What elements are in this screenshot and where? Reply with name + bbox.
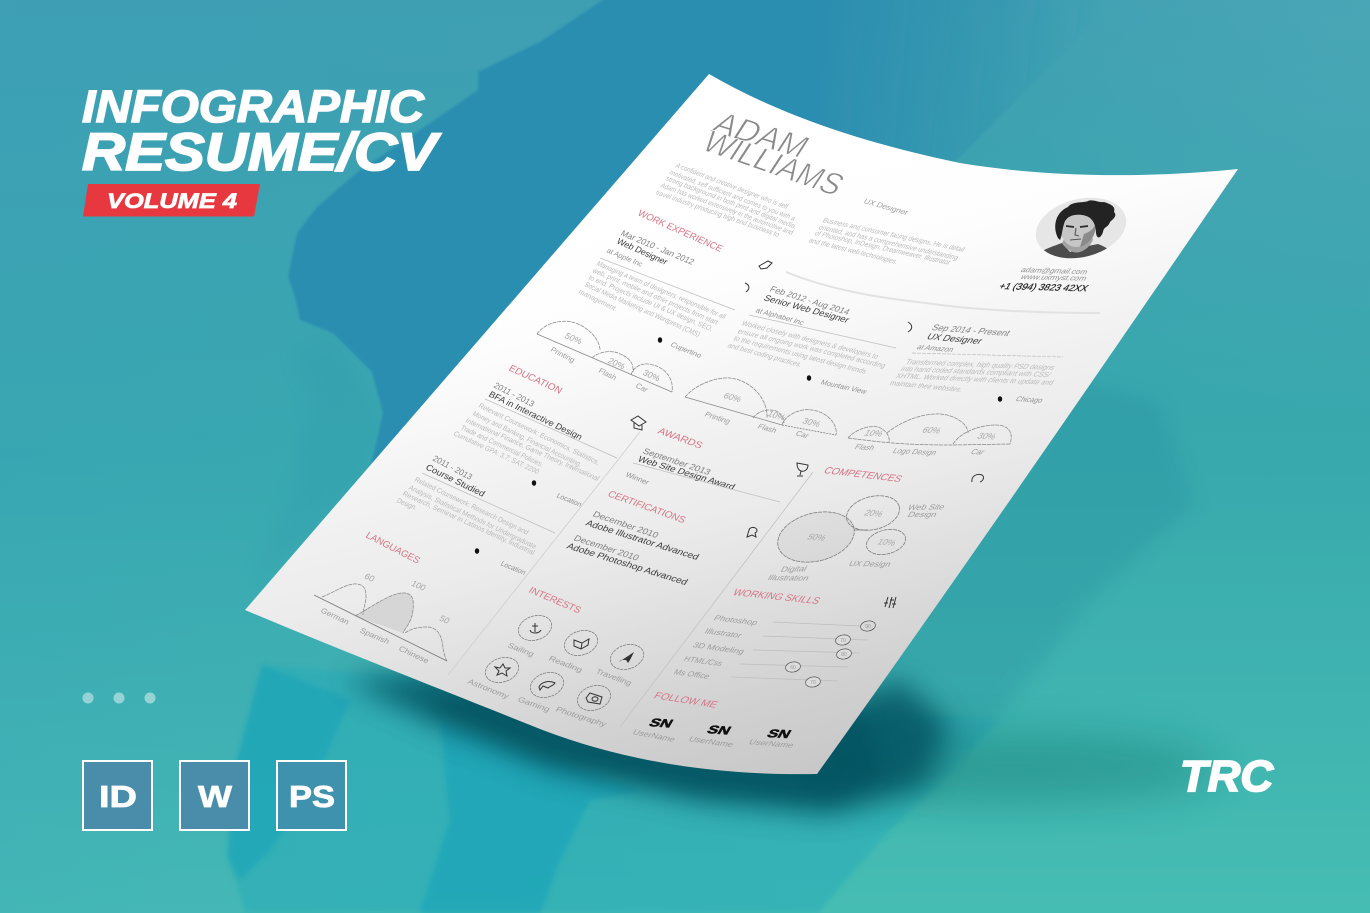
- section: work experience: [577, 208, 735, 360]
- intro paragraph left: motivated, self sufficient and comes to you with a: [668, 168, 798, 223]
- section: competences: COMPETENCES: [821, 466, 904, 485]
- row: Ms Office: 70: [810, 680, 816, 686]
- row: Illustrator: Illustrator: [703, 627, 744, 640]
- chart: skills at third job: [848, 414, 1011, 457]
- section: awards: Web Site Design Award: [636, 454, 737, 492]
- section: education: Course Studied: [424, 462, 487, 499]
- section: education: Trade and Commercial Policies.: [459, 423, 545, 469]
- chart: skills at third job: 10%: [862, 428, 885, 438]
- contact details: www.uxmyst.com: [1018, 273, 1089, 283]
- icon: anchor: [515, 611, 555, 645]
- section: job two: Senior Web Designer: [762, 293, 851, 325]
- section: interests: Travelling: [594, 667, 634, 687]
- chart: skills at first job: Printing: [549, 345, 577, 364]
- chart: skills at first job: 30%: [641, 368, 663, 383]
- section: job three: UX Designer: [925, 331, 985, 346]
- intro paragraph right: of Photoshop, InDesign, Dreamweaver, Illustrator: [813, 229, 953, 267]
- social: first: SN: [646, 716, 676, 730]
- icon: plane: [607, 640, 647, 674]
- section: languages: Spanish: [358, 626, 391, 646]
- icon: star: [482, 653, 522, 687]
- chart: skills at third job: 60%: [920, 425, 943, 435]
- row: Illustrator: [703, 627, 868, 646]
- portrait photo: [1036, 198, 1126, 258]
- social: third: [747, 727, 796, 750]
- row: 3D Modeling: 80: [841, 652, 847, 658]
- chart: skills at second job: Printing: [703, 410, 732, 426]
- chart: skills at third job: Car: [969, 448, 987, 456]
- intro paragraph right: and the latest web technologies.: [807, 236, 900, 266]
- contact details: +1 (394) 3823 42XX: [996, 282, 1091, 294]
- section: education: Relevant Coursework: Economics, Statistics,: [477, 401, 602, 467]
- chart: bubbles: 20%: [862, 508, 885, 519]
- section: certifications: Adobe Photoshop Advanced: [565, 541, 690, 587]
- social: first: [631, 716, 678, 744]
- chart: skills at first job: [537, 321, 672, 394]
- icon: gauge: [972, 474, 983, 482]
- badge: W: W: [198, 779, 233, 814]
- chart: bubbles: 50%: [805, 532, 828, 543]
- panel: resume sheet: [245, 74, 1238, 774]
- name: WILLIAMS: [696, 124, 851, 202]
- section: job two: to the requirements using latest design trends: [732, 334, 869, 376]
- chart: skills at first job: Flash: [597, 366, 618, 382]
- section: interests: Reading: [547, 654, 585, 674]
- icon: wrench: [759, 261, 772, 269]
- social: third: SN: [764, 727, 794, 741]
- section: working skills: WORKING SKILLS: [730, 588, 822, 607]
- section: awards: [624, 426, 808, 502]
- badge: W: [180, 761, 249, 830]
- section: awards: AWARDS: [655, 426, 705, 451]
- row: Illustrator: 70: [840, 638, 846, 644]
- row: 3D Modeling: [691, 641, 860, 660]
- row: Ms Office: Ms Office: [672, 668, 712, 681]
- section: work experience: Social Media Marketing and Wordpress (CMS): [583, 280, 702, 339]
- section: education: 2011 - 2013: [492, 380, 537, 409]
- icon: camera: [574, 681, 614, 715]
- section: education: Analysis, Statistical Methods for Undergraduate: [407, 483, 538, 551]
- badge: PS: PS: [289, 779, 335, 814]
- chart: skills at second job: Car: [794, 429, 811, 440]
- section: languages: 60: [363, 571, 377, 584]
- section: job three: maintain their websites.: [888, 379, 965, 394]
- contact details: [996, 266, 1091, 294]
- section: job two: Feb 2012 - Aug 2014: [768, 284, 852, 317]
- social: second: SN: [704, 723, 734, 737]
- section: interests: INTERESTS: [526, 585, 583, 616]
- icon: pin: [475, 548, 479, 554]
- name: ADAM: [706, 105, 817, 164]
- timeline curve: [786, 272, 1100, 313]
- icon: pin: [532, 480, 536, 486]
- chart: skills at first job: Car: [634, 381, 650, 394]
- section: job three: at Amazon: [915, 343, 956, 354]
- section: certifications: December 2010: [591, 509, 661, 540]
- section: languages: 100: [409, 578, 428, 593]
- logo: TRC: TRC: [1180, 752, 1274, 801]
- chart: skills at second job: 10%: [766, 409, 788, 422]
- chart: skills at second job: 60%: [722, 391, 744, 404]
- row: Ms Office: [672, 668, 838, 688]
- volume badge: [83, 184, 260, 216]
- section: education: Related Coursework: Research Design and: [413, 475, 531, 537]
- volume badge: VOLUME 4: [107, 190, 237, 213]
- section: education: 2011 - 2013: [431, 453, 475, 482]
- section: work experience: Web Designer: [615, 236, 670, 267]
- contact details: adam@gmail.com: [1019, 266, 1090, 276]
- section: interests: Photography: [554, 705, 609, 729]
- section: interests: Gaming: [516, 695, 552, 714]
- section: certifications: Adobe Illustrator Advanced: [584, 518, 701, 562]
- section: education: Money and Banking, Financial Accounting,: [471, 409, 584, 469]
- intro paragraph left: Adam has worked extensively in the automotive and: [659, 181, 795, 237]
- role: UX Designer: [862, 197, 911, 217]
- section: languages: LANGUAGES: [363, 530, 422, 566]
- section: interests: [466, 585, 647, 729]
- icon: book: [561, 626, 601, 660]
- section: work experience: web, print, mobile and other projects from start: [590, 266, 720, 326]
- intro paragraph left: strong background in both print and digital media.: [664, 174, 799, 231]
- chart: skills at second job: [685, 378, 836, 440]
- section: education: Research, Seminar in Latinos Identity, Industrial: [401, 489, 537, 557]
- icon: pin: [998, 396, 1002, 402]
- section: certifications: CERTIFICATIONS: [605, 489, 688, 526]
- intro paragraph left: travel industry producing high end business to: [654, 188, 781, 239]
- section: languages: [314, 530, 452, 665]
- row: HTML/Css: 60: [790, 665, 796, 671]
- section: languages: 50: [438, 613, 452, 626]
- section: languages: Chinese: [397, 644, 431, 665]
- section: competences: [766, 466, 983, 583]
- section: education: Location: [555, 491, 584, 509]
- social: third: UserName: [747, 738, 796, 750]
- chart: skills at second job: Flash: [756, 422, 779, 435]
- section: work experience: at Apple Inc: [605, 246, 645, 269]
- title: INFOGRAPHIC: [82, 81, 426, 132]
- section: work experience: Cupertino: [669, 340, 704, 360]
- section: job two: Mountain View: [819, 378, 869, 396]
- section: education: Cumulative GPA: 3.7; SAT: 2200: [452, 429, 541, 476]
- chart: skills at third job: Logo Design: [891, 447, 939, 457]
- section: education: Location: [499, 559, 528, 577]
- section: job two: Worked closely with designers & developers to: [740, 319, 881, 361]
- divider: columns left: [448, 432, 640, 675]
- section: competences: Digital: [779, 565, 809, 574]
- intro paragraph left: A confident and creative designer who is self: [674, 161, 791, 211]
- section: competences: Design: [906, 511, 939, 519]
- section: interests: Sailing: [506, 641, 536, 658]
- section: awards: Winner: [624, 470, 652, 487]
- badge: ID: ID: [99, 779, 137, 814]
- row: 3D Modeling: 3D Modeling: [691, 641, 746, 656]
- section: job three: Sep 2014 - Present: [930, 323, 1013, 338]
- social: second: [687, 723, 736, 749]
- section: certifications: December 2010: [572, 533, 641, 562]
- section: job three: Chicago: [1014, 395, 1045, 405]
- intro paragraph right: Business and consumer facing designs. He is detail: [821, 216, 967, 254]
- chart: skills at third job: Flash: [853, 443, 877, 452]
- row: Photoshop: [712, 614, 876, 632]
- icon: sliders: [884, 597, 896, 608]
- section: interests: Astronomy: [466, 677, 511, 701]
- section: job two: [726, 284, 896, 396]
- section: education: [395, 363, 617, 577]
- section: job two: at Alphabet Inc: [754, 306, 806, 327]
- section: follow me: FOLLOW ME: [651, 691, 720, 711]
- section: job three: [888, 323, 1063, 405]
- icon: chevron first: [745, 283, 749, 292]
- software badges: [83, 761, 346, 830]
- section: competences: UX Design: [847, 560, 893, 569]
- title: [82, 81, 442, 182]
- section: education: EDUCATION: [506, 363, 564, 396]
- icon: gamepad: [527, 668, 567, 702]
- intro paragraph right: oriented, and has a comprehensive understanding: [817, 223, 960, 262]
- section: job two: ensure all ongoing work was completed according: [736, 327, 888, 370]
- section: competences: Illustration: [766, 574, 811, 583]
- section: education: BFA in Interactive Design: [487, 389, 584, 442]
- row: HTML/Css: [682, 655, 848, 673]
- icon: pin: [807, 375, 811, 381]
- divider: columns right: [620, 472, 813, 727]
- section: job three: XHTML. Worked directly with clients to update and: [894, 372, 1056, 387]
- section: education: Design.: [395, 496, 419, 512]
- social: first: UserName: [631, 728, 678, 744]
- section: awards: September 2013: [641, 446, 713, 477]
- section: follow me: [631, 691, 796, 750]
- section: work experience: to end. Projects include UI & UX design, SEO,: [587, 273, 715, 333]
- icon: graduation cap: [631, 416, 646, 430]
- chart: language curves: [314, 584, 447, 661]
- chart: skills at first job: 20%: [606, 356, 628, 371]
- section: competences: Web Site: [906, 503, 947, 512]
- icon: ribbon: [747, 527, 757, 537]
- chart: skills at first job: 50%: [563, 331, 585, 346]
- icon: trophy: [797, 463, 808, 476]
- section: work experience: WORK EXPERIENCE: [635, 208, 725, 255]
- sheet paper: [245, 74, 1238, 774]
- row: Photoshop: Photoshop: [712, 614, 760, 627]
- section: education: International Finance, Game Theory, International: [464, 416, 602, 483]
- pagination dots: [82, 692, 156, 704]
- section: certifications: [565, 489, 757, 587]
- section: languages: German: [319, 606, 351, 626]
- chart: skills at third job: 30%: [975, 431, 998, 441]
- section: job three: Transformed complex, high quality PSD designs: [904, 358, 1057, 372]
- section: work experience: Mar 2010 - Jan 2012: [619, 228, 697, 267]
- chart: skills at second job: 30%: [801, 416, 823, 429]
- row: Photoshop: 90: [865, 624, 871, 630]
- icon: pin: [658, 337, 662, 343]
- icon: chevron second: [908, 322, 912, 332]
- intro paragraph left: [654, 161, 799, 239]
- section: job two: and best coding practices.: [726, 341, 804, 369]
- section: job three: into hand coded standards compliant with CSS/: [899, 365, 1054, 379]
- badge: ID: [83, 761, 152, 830]
- section: working skills: [672, 588, 896, 688]
- chart: bubbles: 10%: [875, 537, 898, 548]
- title: RESUME/CV: [82, 123, 442, 182]
- section: work experience: management.: [577, 287, 620, 313]
- chart: bubbles: [772, 490, 908, 570]
- section: work experience: Managing a team of designers, responsible for all: [595, 259, 728, 321]
- badge: PS: [277, 761, 346, 830]
- social: second: UserName: [687, 735, 736, 749]
- row: HTML/Css: HTML/Css: [682, 655, 725, 668]
